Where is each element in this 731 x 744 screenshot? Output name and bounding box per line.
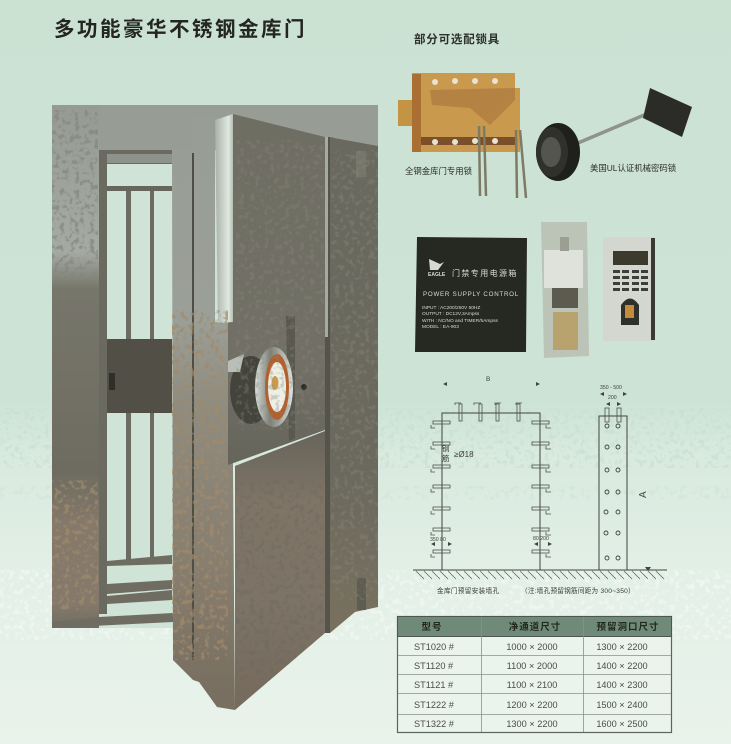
door lower face bbox=[235, 431, 325, 710]
dial face bbox=[268, 362, 286, 412]
jamb outer column bbox=[193, 115, 235, 710]
dial front bbox=[536, 127, 568, 177]
table rows bbox=[414, 642, 648, 729]
transom band bbox=[107, 154, 172, 163]
table rows: ST1222 # bbox=[414, 700, 455, 710]
reader body bbox=[603, 237, 655, 341]
heading: optional locks: 部分可选配锁具 bbox=[414, 32, 500, 46]
panel: power supply control bbox=[415, 237, 527, 352]
diameter label: ≥Ø18 bbox=[454, 450, 474, 459]
icon: fingerprint reader bbox=[603, 237, 655, 341]
table rows: 1500 × 2400 bbox=[596, 700, 648, 710]
dial outer bbox=[536, 123, 580, 181]
gate bars bbox=[126, 191, 154, 560]
diagram caption: 金库门预留安装墙孔 bbox=[437, 586, 500, 595]
title: 多功能豪华不锈钢金库门 bbox=[54, 17, 307, 41]
header cells bbox=[421, 621, 660, 633]
key lock bbox=[301, 384, 307, 390]
table rows: 1100 × 2100 bbox=[507, 680, 557, 690]
door upper face bbox=[228, 114, 325, 465]
lock body bbox=[412, 73, 520, 152]
dial centre bbox=[541, 137, 561, 167]
plate bbox=[541, 222, 589, 358]
table rows: 1100 × 2000 bbox=[507, 661, 557, 671]
table rows: ST1120 # bbox=[414, 661, 454, 671]
vault door illustration bbox=[52, 105, 378, 710]
panel: power supply control: WITH : NC/NO and TIMER/5Ampss bbox=[422, 318, 498, 324]
caption: combination lock: 美国UL认证机械密码锁 bbox=[590, 163, 677, 173]
lintel flat tone bbox=[99, 105, 334, 150]
installation diagram bbox=[413, 376, 667, 595]
lock left strip bbox=[412, 74, 421, 152]
ground hatching bbox=[416, 571, 664, 579]
gate bottom rails bbox=[52, 555, 173, 628]
rebar note: 钢 bbox=[442, 443, 450, 453]
header cells: 净通道尺寸 bbox=[509, 621, 561, 633]
icon: electric lock bbox=[541, 222, 589, 358]
door upper strip highlight bbox=[325, 137, 328, 337]
panel chinese: 门禁专用电源箱 bbox=[452, 268, 518, 278]
display bbox=[613, 251, 648, 265]
side holes bbox=[604, 424, 620, 560]
dimension B: B bbox=[486, 376, 490, 383]
side wall elevation bbox=[599, 416, 627, 570]
rebar top bbox=[455, 403, 522, 421]
table rows: 1200 × 2200 bbox=[506, 700, 558, 710]
speckled background band bbox=[0, 408, 731, 640]
lock box bbox=[643, 88, 692, 137]
table rows: ST1020 # bbox=[414, 642, 455, 652]
hinge top bbox=[356, 151, 366, 177]
coil bbox=[553, 312, 578, 350]
header cells: 型号 bbox=[421, 621, 443, 633]
dim arrows bbox=[431, 392, 627, 546]
table rows: ST1322 # bbox=[414, 719, 455, 729]
transom rail bbox=[107, 186, 172, 191]
door thick edge bbox=[215, 114, 233, 323]
gate lock bbox=[109, 373, 115, 390]
dial orange ring bbox=[265, 354, 289, 420]
dial silver ring bbox=[255, 347, 293, 427]
handle highlight bbox=[228, 354, 244, 372]
diagram note: （注:墙孔预留钢筋间距为 300~350） bbox=[521, 586, 635, 595]
shaft bbox=[560, 237, 569, 251]
fingerprint bbox=[625, 305, 634, 318]
side dimension label: 200 bbox=[608, 395, 617, 401]
spring bbox=[552, 288, 578, 308]
table rows: 1400 × 2200 bbox=[596, 661, 648, 671]
lock holes bbox=[432, 78, 498, 145]
keypad bbox=[613, 270, 648, 291]
table lines bbox=[398, 617, 671, 732]
ground line bbox=[413, 569, 667, 571]
vault left wall and top lintel bbox=[52, 105, 378, 628]
side dimension label: 350 - 500 bbox=[600, 385, 622, 391]
inner gate middle panel bbox=[107, 339, 172, 413]
table rows: 1400 × 2300 bbox=[596, 680, 648, 690]
rebar right bbox=[532, 421, 551, 557]
caption: gold lock: 全钢金库门专用锁 bbox=[405, 166, 473, 176]
lock block bbox=[544, 250, 583, 288]
table rows: 1300 × 2200 bbox=[596, 642, 648, 652]
wall opening outline bbox=[442, 413, 540, 570]
header cells: 预留洞口尺寸 bbox=[596, 621, 660, 633]
dimension A: A bbox=[638, 491, 649, 498]
jamb column bbox=[172, 150, 193, 680]
handle shadow bbox=[230, 356, 272, 424]
vault right wall top bbox=[334, 105, 378, 146]
panel heading: POWER SUPPLY CONTROL bbox=[423, 291, 519, 298]
panel: power supply control: OUTPUT : DC12V,3Ampss bbox=[422, 311, 480, 317]
icon: combination lock bbox=[536, 88, 692, 181]
eagle logo bbox=[429, 259, 444, 270]
power box bbox=[415, 237, 527, 352]
table header bbox=[398, 616, 672, 636]
lock bolt bbox=[398, 100, 413, 126]
panel: power supply control: MODEL : EA-903 bbox=[422, 324, 459, 330]
dimension B bbox=[443, 376, 540, 386]
right dimensions: 80 200 bbox=[533, 536, 549, 542]
jamb groove bbox=[192, 153, 194, 660]
opening top frame bbox=[99, 150, 172, 614]
reader side bbox=[651, 238, 655, 340]
recess slot bbox=[286, 316, 295, 441]
mottling speckles bbox=[52, 110, 378, 680]
lock rod bbox=[578, 110, 656, 143]
left dimensions: 350 80 bbox=[430, 537, 446, 543]
vault opening glass bbox=[99, 150, 173, 628]
side rebars bbox=[605, 408, 621, 422]
lock mechanism bbox=[430, 88, 515, 125]
table rows: ST1121 # bbox=[414, 680, 454, 690]
dial centre bbox=[272, 376, 278, 390]
table rows: 1600 × 2500 bbox=[596, 719, 648, 729]
icon: gold vault lock bbox=[398, 73, 526, 198]
lock bottom strip bbox=[421, 137, 516, 145]
sensor bbox=[621, 298, 639, 325]
vault right wall bbox=[330, 137, 378, 633]
spec lines: INPUT : AC200/250V 50HZ bbox=[422, 305, 480, 311]
rebar note: 筋 bbox=[442, 453, 450, 463]
ground mark bbox=[645, 567, 651, 571]
logo word: EAGLE bbox=[428, 272, 446, 278]
hinge bottom bbox=[357, 578, 366, 610]
door right strip bbox=[325, 137, 330, 633]
table body bbox=[398, 616, 672, 732]
lock keys bbox=[479, 126, 526, 198]
table rows: 1000 × 2000 bbox=[506, 642, 558, 652]
spec table bbox=[398, 616, 672, 732]
table rows: 1300 × 2200 bbox=[506, 719, 558, 729]
rebar left bbox=[431, 421, 450, 557]
